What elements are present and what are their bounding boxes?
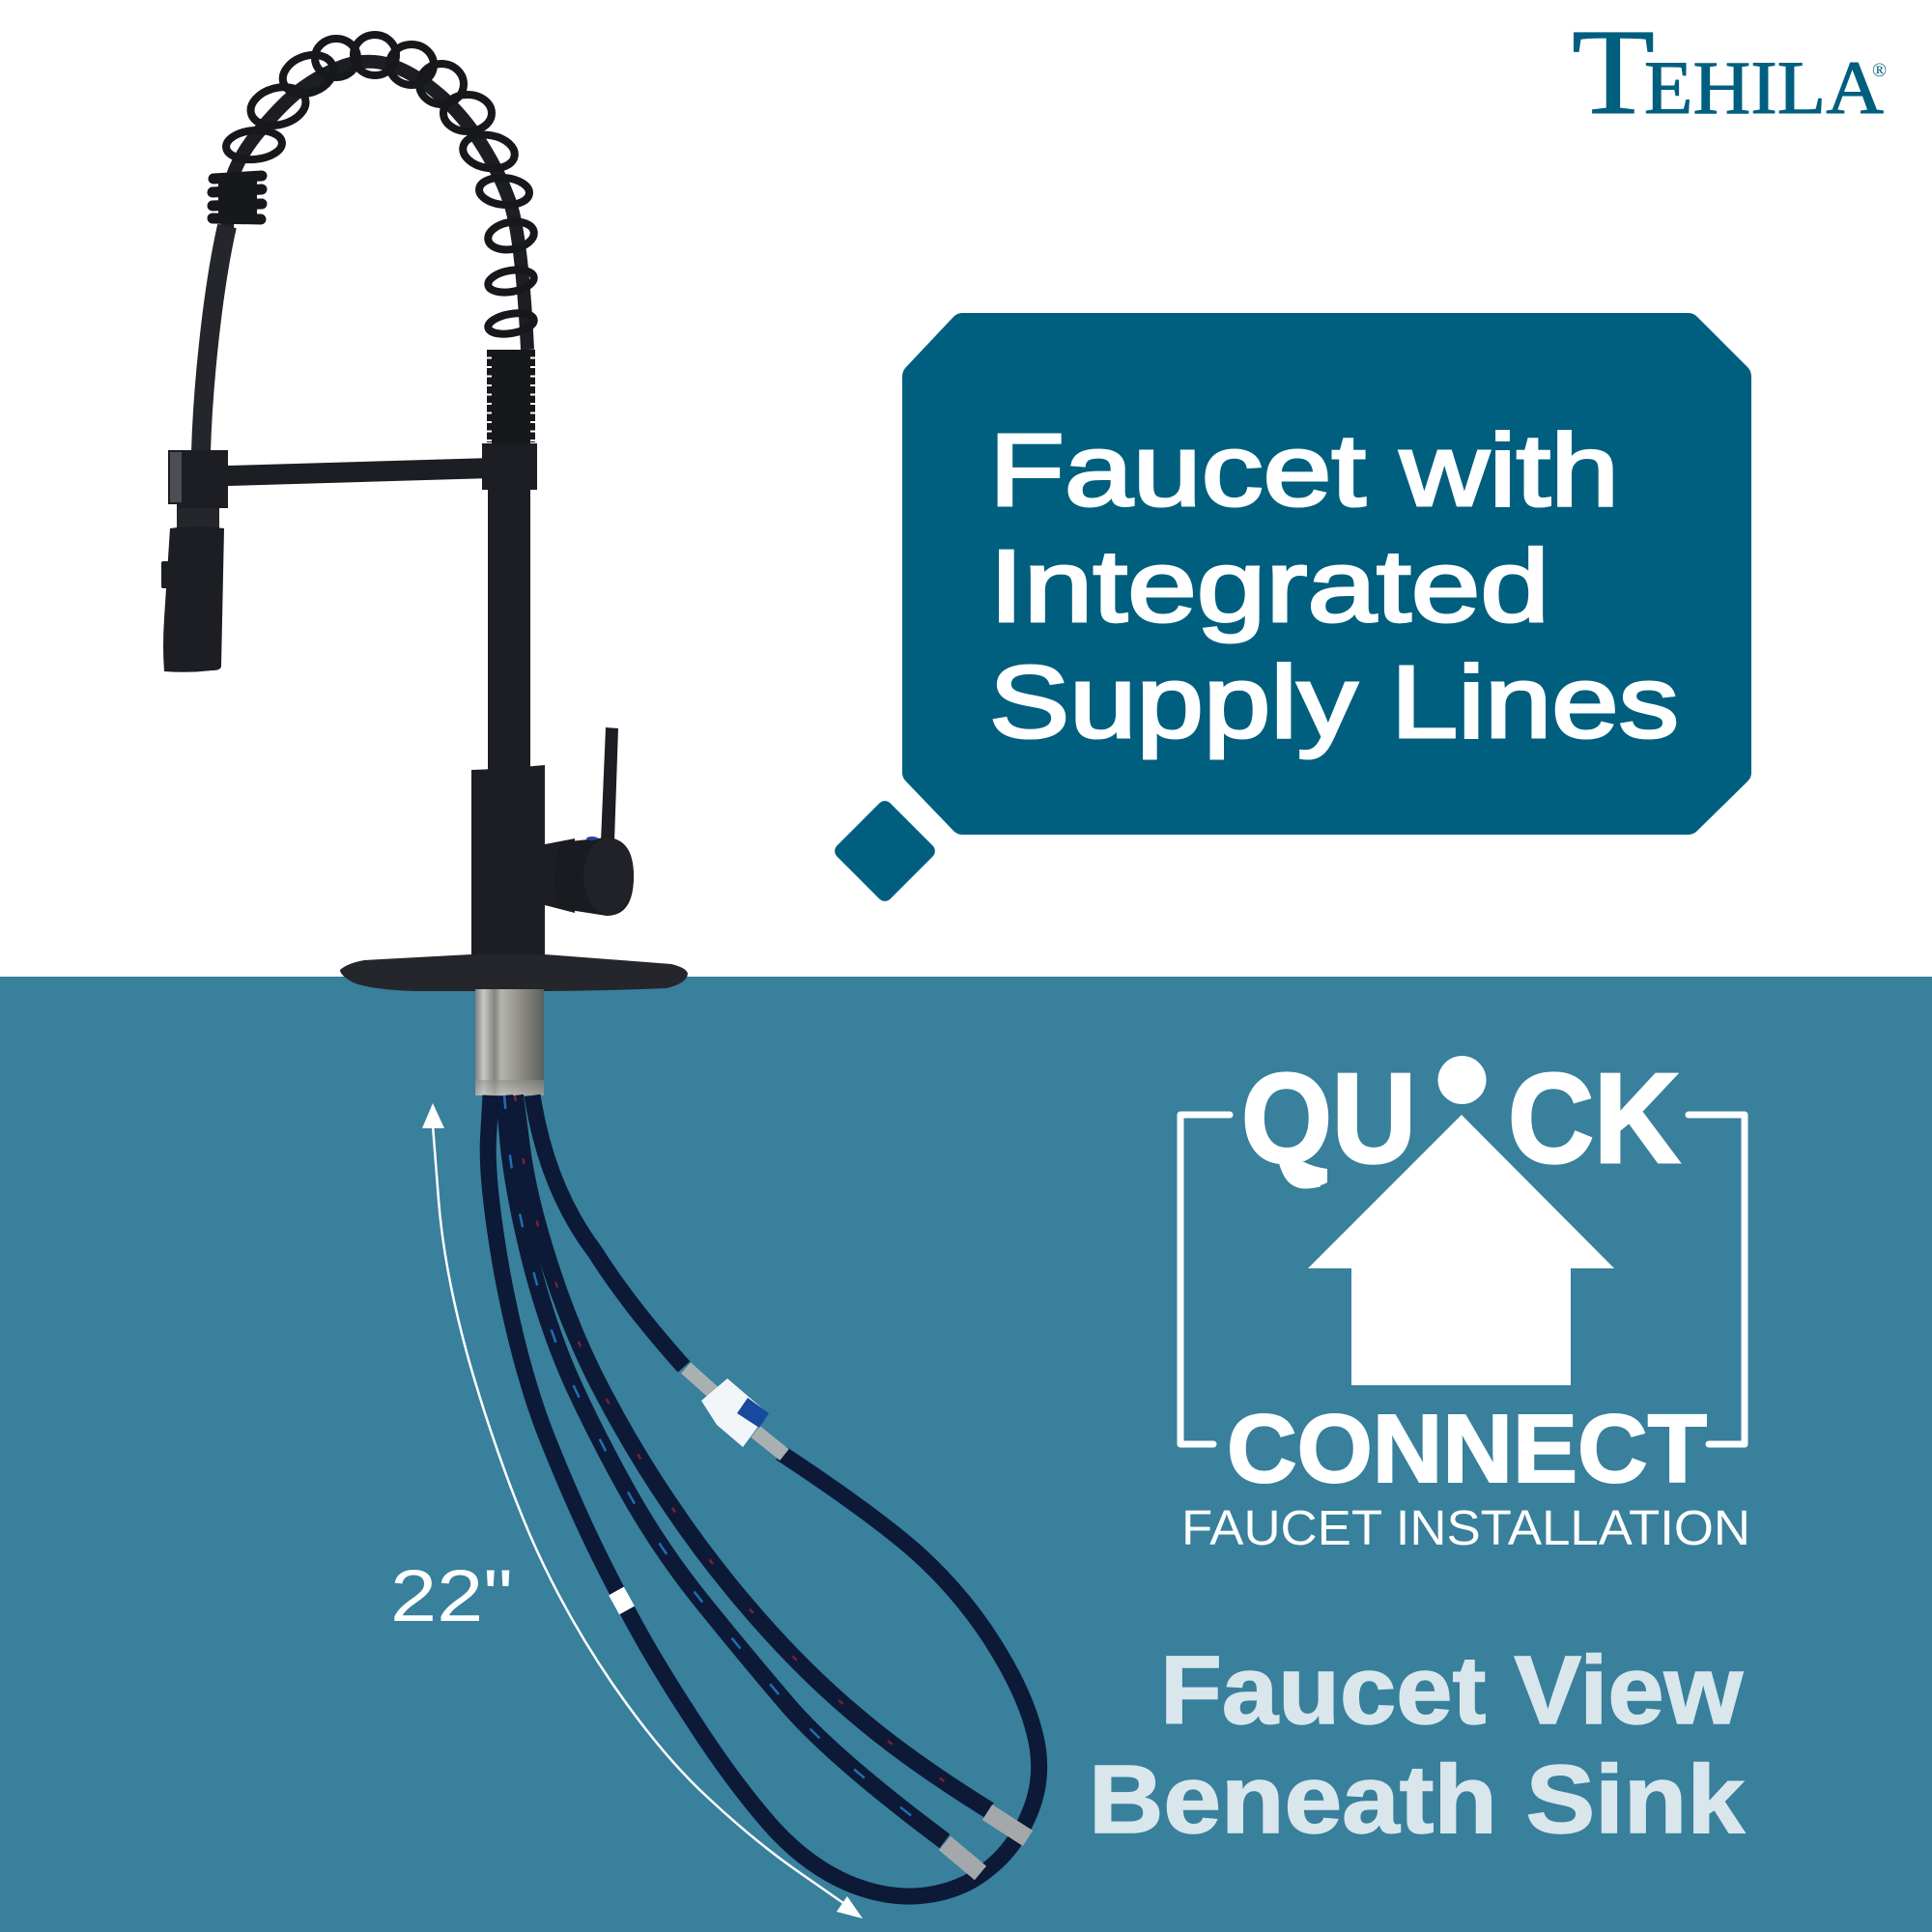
hose: branch to check valve <box>532 1095 684 1367</box>
lever <box>601 727 618 841</box>
faucet hose and arch <box>227 62 527 350</box>
house <box>1308 1115 1614 1385</box>
handle connector <box>496 838 575 913</box>
caption: faucet view beneath sink <box>1089 1636 1745 1854</box>
left dense coil <box>213 176 262 220</box>
faucet shank metal cylinder <box>475 989 544 1095</box>
hose: red stripe line <box>515 1095 989 1810</box>
bracket frame <box>1180 1115 1745 1444</box>
arrowhead up <box>422 1103 444 1128</box>
dot <box>1437 1056 1486 1104</box>
spray button <box>161 561 171 588</box>
logo: Tehila: T <box>1572 5 1655 140</box>
word quick <box>1241 1047 1680 1189</box>
spray holder <box>168 450 228 508</box>
q tail <box>1280 1159 1327 1186</box>
valve body <box>471 765 545 972</box>
hose: long loop with white tag <box>488 1095 1039 1896</box>
deck plate <box>340 954 688 991</box>
check valve connector <box>686 1368 784 1455</box>
logo: quick connect faucet installation <box>1180 1047 1750 1555</box>
white hose tag <box>616 1591 627 1610</box>
callout text: Integrated <box>989 529 1549 643</box>
subtitle: FAUCET INSTALLATION <box>1181 1500 1750 1555</box>
lower left hose <box>201 226 227 452</box>
caption: faucet view beneath sink: Beneath Sink <box>1089 1746 1745 1854</box>
word connect: CONNECT <box>1227 1395 1707 1503</box>
spray holder highlight <box>170 452 182 502</box>
handle end cap <box>583 838 634 915</box>
dimension label: 22" <box>390 1555 513 1637</box>
spring coil loops <box>225 35 536 337</box>
hot-cold indicator <box>586 837 598 840</box>
logo: Tehila: EHILA <box>1644 45 1884 129</box>
handle cylinder <box>554 838 634 916</box>
faucet: upper matte black body <box>161 35 688 991</box>
panel: lower teal background <box>0 977 1932 1932</box>
collar <box>482 443 537 490</box>
caption: faucet view beneath sink: Faucet View <box>1160 1636 1743 1745</box>
logo: Tehila: ® <box>1872 60 1887 81</box>
horizontal support bar <box>228 458 493 486</box>
word quick: CK <box>1508 1047 1680 1189</box>
spray head <box>163 526 224 672</box>
arrowhead down <box>837 1896 863 1918</box>
callout: faucet with integrated supply lines <box>832 313 1751 904</box>
supply lines: braided hoses <box>488 1095 1039 1896</box>
hose: blue stripe line <box>504 1095 945 1841</box>
callout pointer diamond <box>832 798 938 904</box>
logo: Tehila <box>1572 5 1887 140</box>
word quick: QU <box>1241 1047 1416 1189</box>
upper pipe <box>488 488 530 774</box>
callout text: Faucet with <box>989 413 1619 527</box>
callout text: Supply Lines <box>989 645 1679 759</box>
hose end fittings <box>945 1812 1028 1873</box>
callout text <box>989 413 1679 759</box>
dimension arrow <box>422 1103 863 1918</box>
right dense coil <box>492 350 530 443</box>
spray neck <box>177 508 219 529</box>
